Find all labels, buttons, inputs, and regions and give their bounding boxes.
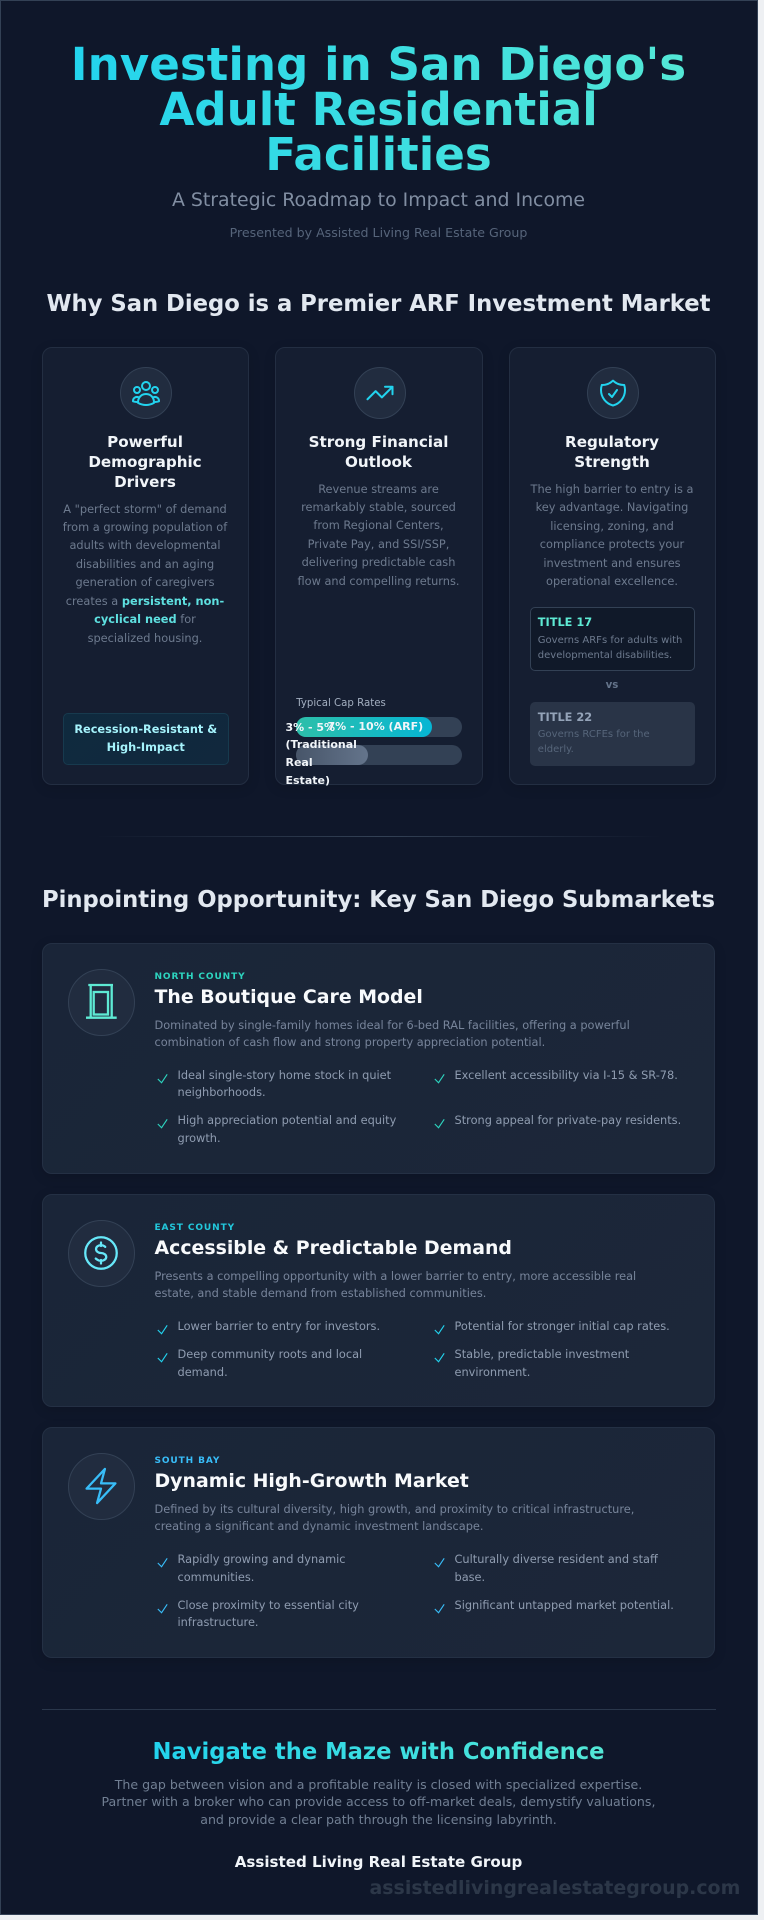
panel: demographic drivers xyxy=(42,346,248,784)
bullet: base. xyxy=(454,1570,485,1584)
icon: trending up xyxy=(354,366,406,418)
heading: Drivers xyxy=(114,473,176,491)
title 22 text: Governs RCFEs for the xyxy=(538,729,650,740)
body text: Private Pay, and SSI/SSP, xyxy=(308,537,449,551)
closing heading xyxy=(0,1737,758,1767)
closing text xyxy=(102,1776,655,1827)
bullet: Stable, predictable investment xyxy=(454,1347,629,1361)
body text: compliance protects your xyxy=(540,537,684,551)
heading: The Boutique Care Model xyxy=(154,986,423,1008)
bullet xyxy=(158,1113,396,1145)
region label: SOUTH BAY xyxy=(154,1456,220,1466)
bullet: High appreciation potential and equity xyxy=(178,1113,396,1127)
bullet: Ideal single-story home stock in quiet xyxy=(178,1068,391,1082)
body text: specialized housing. xyxy=(88,631,202,645)
body text: adults with developmental xyxy=(69,538,221,552)
body text: investment and ensures xyxy=(543,556,681,570)
title 22 text xyxy=(538,729,650,755)
callout text: High-Impact xyxy=(107,740,185,754)
body text: flow and compelling returns. xyxy=(298,574,459,588)
bullet: Culturally diverse resident and staff xyxy=(454,1552,658,1566)
closing text: The gap between vision and a profitable reality is closed with specialized expertise. xyxy=(115,1776,642,1792)
closing text: and provide a clear path through the licensing labyrinth. xyxy=(200,1812,557,1827)
description: creating a significant and dynamic investment landscape. xyxy=(154,1519,484,1533)
body text xyxy=(63,502,228,645)
heading: Strong Financial xyxy=(309,433,448,451)
bar value: traditional: 3% - 5% xyxy=(286,720,335,734)
body text: disabilities and an aging xyxy=(76,557,214,571)
chart label: Typical Cap Rates xyxy=(296,698,386,709)
bar value: traditional xyxy=(286,720,357,787)
region label: EAST COUNTY xyxy=(154,1222,235,1232)
bar track: ARF xyxy=(296,717,462,737)
icon: dollar xyxy=(68,1220,134,1286)
body text: cyclical need for xyxy=(94,612,196,626)
title: Facilities xyxy=(265,128,492,180)
title 17 box xyxy=(530,606,695,671)
description xyxy=(154,1018,630,1049)
title 17 text: developmental disabilities. xyxy=(538,650,672,661)
bullet: Strong appeal for private-pay residents. xyxy=(454,1113,681,1127)
heading: Accessible & Predictable Demand xyxy=(154,1237,512,1259)
panel: financial outlook xyxy=(274,346,482,784)
description xyxy=(154,1268,636,1300)
body text: A "perfect storm" of demand xyxy=(63,502,227,516)
heading: Dynamic High-Growth Market xyxy=(154,1470,469,1492)
section heading: why San Diego: Why San Diego is a Premier ARF Investment Market xyxy=(46,290,711,316)
bar value: traditional: Estate) xyxy=(286,774,330,787)
body text: delivering predictable cash xyxy=(302,555,455,569)
description: Dominated by single-family homes ideal for 6-bed RAL facilities, offering a powerful xyxy=(154,1018,630,1032)
bullet: neighborhoods. xyxy=(178,1085,266,1099)
body text: operational excellence. xyxy=(546,574,678,588)
title 17 heading: TITLE 17 xyxy=(538,615,592,629)
heading xyxy=(88,433,202,491)
bullet xyxy=(158,1068,391,1099)
heading: Powerful xyxy=(107,433,183,451)
bar fill: traditional xyxy=(296,745,368,765)
bullet: communities. xyxy=(178,1570,254,1584)
panel: regulatory strength xyxy=(508,346,716,784)
icon: shield check xyxy=(586,366,638,418)
body text: licensing, zoning, and xyxy=(550,519,674,533)
title 17 text xyxy=(538,634,682,661)
bullet xyxy=(158,1347,362,1379)
icon: people xyxy=(120,366,172,418)
bar value: traditional: (Traditional xyxy=(286,738,357,751)
bullet: Lower barrier to entry for investors. xyxy=(178,1319,380,1333)
title 22 box xyxy=(530,702,695,766)
bullet: environment. xyxy=(454,1365,530,1379)
bullet xyxy=(158,1552,346,1584)
bullet: Significant untapped market potential. xyxy=(454,1598,674,1612)
title xyxy=(0,42,758,176)
title 17 text: Governs ARFs for adults with xyxy=(538,634,682,646)
heading: Strength xyxy=(574,453,650,471)
bar track: traditional xyxy=(296,745,462,765)
description: Presents a compelling opportunity with a lower barrier to entry, more accessible real xyxy=(154,1268,636,1282)
body text: The high barrier to entry is a xyxy=(531,482,693,496)
presenter line: Presented by Assisted Living Real Estate Group xyxy=(230,224,527,240)
brand name: Assisted Living Real Estate Group xyxy=(235,1853,522,1871)
bullet: demand. xyxy=(178,1365,228,1379)
closing text: Partner with a broker who can provide access to off-market deals, demystify valuations, xyxy=(102,1794,655,1809)
body text: creates a persistent, non- xyxy=(66,594,224,608)
bullet: Potential for stronger initial cap rates. xyxy=(454,1319,670,1333)
section heading: submarkets: Pinpointing Opportunity: Key San Diego Submarkets xyxy=(42,887,715,913)
bullet: Close proximity to essential city xyxy=(178,1598,359,1612)
body text xyxy=(530,482,693,588)
callout xyxy=(62,713,229,765)
bullet: Rapidly growing and dynamic xyxy=(178,1552,346,1566)
bullet xyxy=(434,1347,629,1379)
description: estate, and stable demand from established communities. xyxy=(154,1286,486,1300)
body text: remarkably stable, sourced xyxy=(301,500,456,514)
callout text xyxy=(74,722,217,754)
bullet: growth. xyxy=(178,1131,221,1145)
bullet: infrastructure. xyxy=(178,1615,259,1629)
bullet xyxy=(158,1598,359,1629)
heading: Demographic xyxy=(88,453,202,471)
body text: generation of caregivers xyxy=(75,575,215,589)
body text: from a growing population of xyxy=(63,520,227,534)
body text xyxy=(298,482,459,588)
subtitle: A Strategic Roadmap to Impact and Income xyxy=(172,189,585,211)
heading: Regulatory xyxy=(565,433,659,451)
heading xyxy=(565,433,659,471)
description: Defined by its cultural diversity, high growth, and proximity to critical infrastructure, xyxy=(154,1502,634,1516)
body text: from Regional Centers, xyxy=(313,518,444,532)
title: Investing in San Diego's xyxy=(71,38,686,90)
bar value: ARF: 7% - 10% (ARF) xyxy=(328,720,423,732)
bullet: Deep community roots and local xyxy=(178,1347,362,1361)
body text: key advantage. Navigating xyxy=(536,500,688,514)
panel: North County xyxy=(42,942,714,1174)
bar fill: ARF xyxy=(296,717,432,737)
watermark url: assistedlivingrealestategroup.com xyxy=(370,1876,740,1898)
heading: Outlook xyxy=(345,453,412,471)
callout text: Recession-Resistant & xyxy=(74,722,217,736)
description: combination of cash flow and strong property appreciation potential. xyxy=(154,1035,545,1049)
heading xyxy=(309,433,448,471)
region label: NORTH COUNTY xyxy=(154,972,246,982)
title: Adult Residential xyxy=(159,82,598,136)
panel: East County xyxy=(42,1194,714,1406)
panel: South Bay xyxy=(42,1426,714,1658)
closing heading: Navigate the Maze with Confidence xyxy=(152,1739,605,1765)
icon: door xyxy=(68,968,134,1036)
bullet: Excellent accessibility via I-15 & SR-78. xyxy=(454,1068,678,1082)
vs label: vs xyxy=(606,680,618,690)
body text: Revenue streams are xyxy=(318,482,439,496)
description xyxy=(154,1502,634,1533)
title 22 heading: TITLE 22 xyxy=(538,710,592,724)
bullet xyxy=(434,1552,658,1584)
icon: bolt xyxy=(68,1452,134,1520)
bar value: traditional: Real xyxy=(286,756,313,769)
title 22 text: elderly. xyxy=(538,744,574,755)
